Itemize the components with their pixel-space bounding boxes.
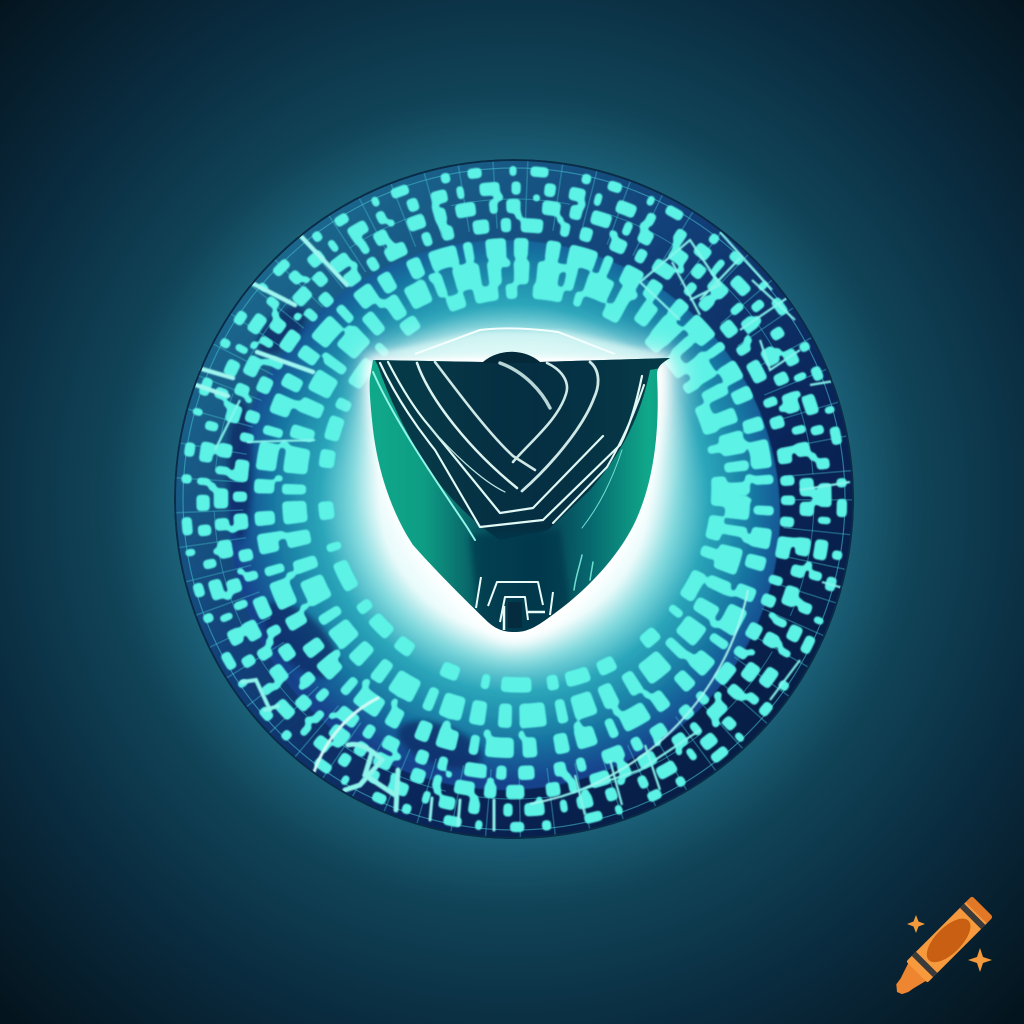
shield [370,352,670,632]
bright bars [195,232,347,396]
panel: circular disc [174,159,854,839]
crayon sparkle right [968,948,992,972]
crayon sparkle left [907,915,925,933]
shield base emblem [476,577,553,630]
crayon body [886,896,993,1003]
shield chevron lines [373,362,644,590]
halo arc [415,328,615,354]
logo: crayon [886,896,993,1003]
outer thin grid [183,168,845,830]
cyan data blocks [186,171,842,827]
inner glow field [230,240,780,790]
outer rim line [175,160,853,838]
bottom left traces [242,680,494,830]
dark patches [228,297,488,779]
shield halo [363,328,679,650]
shield body [370,352,670,632]
shield bump [483,352,540,363]
circuit traces [215,232,850,815]
